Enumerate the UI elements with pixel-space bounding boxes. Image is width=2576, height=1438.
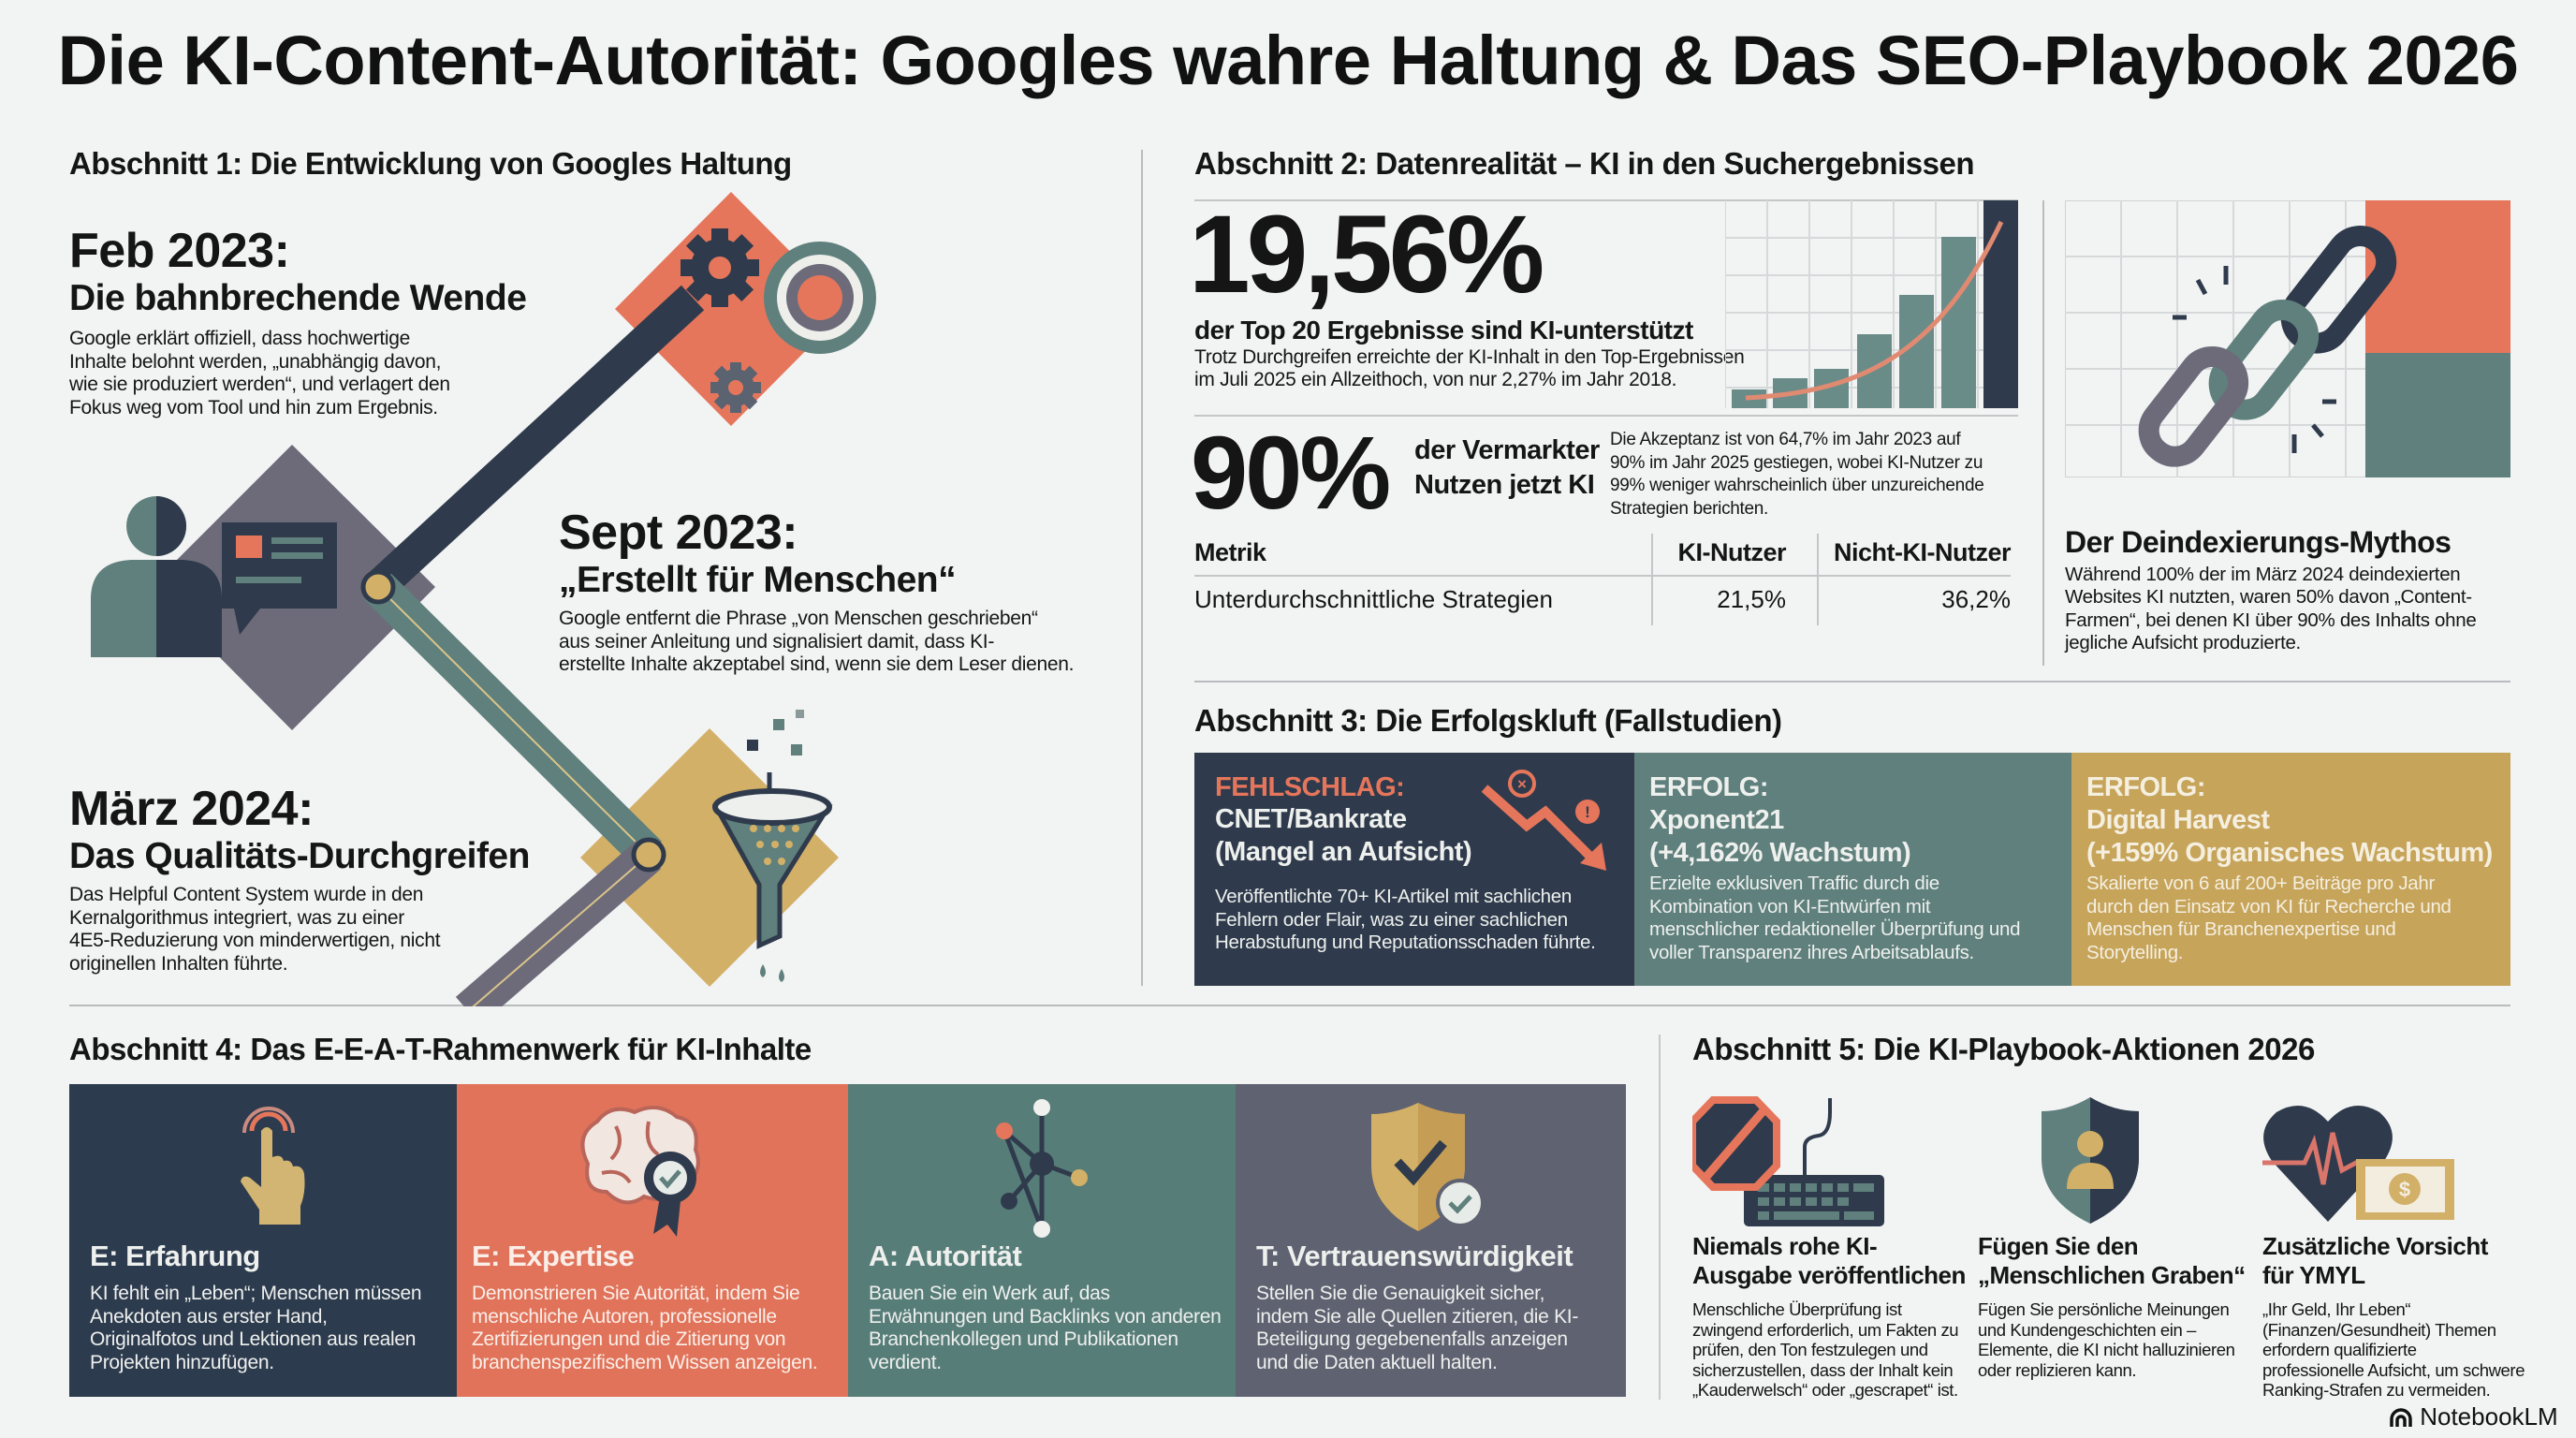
card: Xponent21: (+4,162% Wachstum): [1649, 838, 1910, 868]
panel: Autorität: Erwähnungen und Backlinks von anderen: [869, 1305, 1221, 1328]
panel: Expertise: [457, 1084, 848, 1397]
card: Xponent21: voller Transparenz ihres Arbeitsablaufs.: [1649, 942, 1974, 962]
panel: Vertrauenswürdigkeit: indem Sie alle Quellen zitieren, die KI-: [1256, 1305, 1578, 1328]
panel: Expertise: Demonstrieren Sie Autorität, indem Sie: [472, 1283, 799, 1304]
icon: falling arrow: !: [1585, 803, 1590, 821]
deindexing myth text: Während 100% der im März 2024 deindexierten: [2065, 564, 2460, 585]
section 2 heading: Abschnitt 2: Datenrealität – KI in den Suchergebnissen: [1194, 146, 1974, 181]
panel: Expertise: Zertifizierungen und die Zitierung von: [472, 1328, 785, 1350]
milestone: März 2024: Das Qualitäts-Durchgreifen: [69, 836, 530, 876]
milestone: Feb 2023: Die bahnbrechende Wende: [69, 278, 526, 318]
table: 36,2%: [1941, 585, 2011, 613]
stat description: Die Akzeptanz ist von 64,7% im Jahr 2023 auf: [1610, 430, 1960, 449]
panel: Autorität: verdient.: [869, 1352, 942, 1372]
action: never publish raw: Menschliche Überprüfung ist: [1692, 1299, 1902, 1319]
card: CNET failure: [1194, 753, 1634, 986]
panel: Erfahrung: Anekdoten aus erster Hand,: [90, 1305, 328, 1328]
stat: 19,56%: im Juli 2025 ein Allzeithoch, von nur 2,27% im Jahr 2018.: [1194, 369, 1676, 390]
milestone: Feb 2023: Feb 2023:: [69, 224, 289, 278]
stat: 19,56%: [1189, 193, 1744, 390]
icon: touch hand: [241, 1107, 305, 1225]
card: Xponent21: [1634, 753, 2071, 986]
stat: 90%: 90%: [1191, 416, 1388, 531]
card: Digital Harvest: Menschen für Branchenexpertise und: [2086, 918, 2396, 940]
panel: Erfahrung: E: Erfahrung: [90, 1240, 260, 1272]
action: human moat: „Menschlichen Graben“: [1978, 1261, 2246, 1289]
card: CNET failure: FEHLSCHLAG:: [1215, 772, 1404, 802]
card: CNET failure: CNET/Bankrate: [1215, 804, 1407, 834]
milestone: Sept 2023: „Erstellt für Menschen“: [559, 560, 956, 600]
milestone: Sept 2023: erstellte Inhalte akzeptabel sind, wenn sie dem Leser dienen.: [559, 653, 1074, 675]
icon: shield person: [2042, 1097, 2139, 1224]
stat label: Nutzen jetzt KI: [1414, 470, 1594, 500]
icon: falling arrow: [1481, 770, 1606, 871]
action: YMYL: professionelle Aufsicht, um schwere: [2262, 1359, 2525, 1380]
divider vertical section1/2: [1141, 150, 1143, 986]
panel: Vertrauenswürdigkeit: T: Vertrauenswürdigkeit: [1256, 1240, 1573, 1272]
icon: network: [996, 1099, 1088, 1238]
icon: funnel: [715, 710, 829, 982]
stat description: [1610, 430, 1983, 519]
stat: 19,56%: Trotz Durchgreifen erreichte der KI-Inhalt in den Top-Ergebnissen: [1194, 346, 1744, 368]
deindexing myth text: jegliche Aufsicht produzierte.: [2065, 632, 2301, 653]
card: Digital Harvest: [2071, 753, 2510, 986]
action: never publish raw: prüfen, den Ton festzulegen und: [1692, 1340, 1928, 1359]
panel: Erfahrung: Originalfotos und Lektionen aus realen: [90, 1328, 416, 1350]
action: never publish raw: sicherzustellen, dass der Inhalt kein: [1692, 1359, 1953, 1380]
stat: 19,56%: der Top 20 Ergebnisse sind KI-unterstützt: [1194, 315, 1693, 345]
action: never publish raw: „Kauderwelsch“ oder „gescrapet“ ist.: [1692, 1380, 1958, 1400]
panel: Expertise: menschliche Autoren, professionelle: [472, 1305, 777, 1328]
action: never publish raw: [1692, 1096, 1966, 1400]
card: Digital Harvest: Skalierte von 6 auf 200+ Beiträge pro Jahr: [2086, 873, 2435, 894]
milestone: März 2024: März 2024:: [69, 782, 314, 836]
milestone: März 2024: Das Helpful Content System wurde in den: [69, 884, 423, 905]
action: YMYL: Ranking-Strafen zu vermeiden.: [2262, 1380, 2490, 1400]
card: Digital Harvest: ERFOLG:: [2086, 772, 2205, 802]
title: Die KI-Content-Autorität: Googles wahre Haltung & Das SEO-Playbook 2026: [58, 22, 2518, 99]
section 1 heading: Abschnitt 1: Die Entwicklung von Googles Haltung: [69, 146, 792, 181]
action: human moat: [1978, 1097, 2246, 1380]
diamond: orange: [615, 192, 847, 426]
action: YMYL: Zusätzliche Vorsicht: [2262, 1232, 2488, 1260]
card: CNET failure: Veröffentlichte 70+ KI-Artikel mit sachlichen: [1215, 886, 1572, 907]
card: Digital Harvest: durch den Einsatz von KI für Recherche und: [2086, 895, 2452, 917]
section 3 heading: Abschnitt 3: Die Erfolgskluft (Fallstudien): [1194, 703, 1782, 738]
deindexing myth text: [2065, 525, 2476, 653]
diamond: gray: [150, 445, 435, 730]
action: human moat: Fügen Sie den: [1978, 1232, 2138, 1260]
icon: shield check: [1371, 1103, 1481, 1231]
milestone: März 2024: originellen Inhalten führte.: [69, 953, 287, 974]
card: Xponent21: Kombination von KI-Entwürfen mit: [1649, 895, 1930, 917]
action: never publish raw: zwingend erforderlich, um Fakten zu: [1692, 1320, 1958, 1339]
panel: Vertrauenswürdigkeit: Beteiligung gegebenenfalls anzeigen: [1256, 1328, 1568, 1350]
card: CNET failure: Herabstufung und Reputationsschaden führte.: [1215, 932, 1595, 953]
card: Xponent21: ERFOLG:: [1649, 772, 1768, 802]
card: CNET failure: (Mangel an Aufsicht): [1215, 837, 1471, 867]
table: Unterdurchschnittliche Strategien: [1194, 585, 1553, 613]
panel: Autorität: Bauen Sie ein Werk auf, das: [869, 1283, 1110, 1304]
action: human moat: oder replizieren kann.: [1978, 1359, 2136, 1380]
table: [1194, 534, 2011, 625]
action: YMYL: [2262, 1106, 2525, 1400]
deindexing myth text: Der Deindexierungs-Mythos: [2065, 525, 2451, 559]
section 4 heading: Abschnitt 4: Das E-E-A-T-Rahmenwerk für KI-Inhalte: [69, 1032, 812, 1066]
panel: Erfahrung: Projekten hinzufügen.: [90, 1352, 274, 1372]
card: Xponent21: menschlicher redaktioneller Überprüfung und: [1649, 918, 2020, 940]
bar chart: [1725, 200, 2018, 408]
icon: heart and money: [2262, 1106, 2454, 1222]
panel: Vertrauenswürdigkeit: und die Daten aktuell halten.: [1256, 1352, 1498, 1372]
stat description: 90% im Jahr 2025 gestiegen, wobei KI-Nutzer zu: [1610, 453, 1983, 472]
panel: Expertise: branchenspezifischem Wissen anzeigen.: [472, 1352, 817, 1372]
milestone: Sept 2023: [559, 506, 1074, 675]
stat description: 99% weniger wahrscheinlich über unzureichende: [1610, 476, 1983, 495]
panel: Erfahrung: KI fehlt ein „Leben“; Menschen müssen: [90, 1283, 421, 1304]
action: YMYL: (Finanzen/Gesundheit) Themen: [2262, 1320, 2496, 1339]
case study cards: [1194, 753, 2510, 986]
action: human moat: Fügen Sie persönliche Meinungen: [1978, 1299, 2229, 1319]
stat description: Strategien berichten.: [1610, 498, 1768, 519]
icon: heart and money: $: [2399, 1178, 2410, 1201]
timeline graphic: [91, 192, 876, 1006]
action: YMYL: erfordern qualifizierte: [2262, 1340, 2417, 1359]
stat label: [1414, 435, 1600, 500]
milestone: März 2024: [69, 782, 530, 974]
card: Xponent21: Xponent21: [1649, 805, 1784, 835]
action: human moat: und Kundengeschichten ein –: [1978, 1320, 2196, 1339]
milestone: Feb 2023: [69, 224, 526, 418]
card: Xponent21: Erzielte exklusiven Traffic durch die: [1649, 873, 1939, 894]
table: Nicht-KI-Nutzer: [1834, 538, 2011, 566]
milestone: Sept 2023: Google entfernt die Phrase „von Menschen geschrieben“: [559, 608, 1038, 629]
deindexing myth text: Websites KI nutzten, waren 50% davon „Content-: [2065, 586, 2472, 608]
milestone: Feb 2023: Fokus weg vom Tool und hin zum Ergebnis.: [69, 397, 438, 418]
action: human moat: Elemente, die KI nicht halluzinieren: [1978, 1340, 2235, 1359]
table: KI-Nutzer: [1677, 538, 1786, 566]
card: Digital Harvest: Digital Harvest: [2086, 805, 2270, 835]
panel: Expertise: E: Expertise: [472, 1240, 634, 1272]
table: Metrik: [1194, 538, 1266, 566]
action: YMYL: für YMYL: [2262, 1261, 2365, 1289]
deindexing myth text: Farmen“, bei denen KI über 90% des Inhalts ohne: [2065, 609, 2476, 631]
panel: Vertrauenswürdigkeit: Stellen Sie die Genauigkeit sicher,: [1256, 1283, 1544, 1304]
section 5 heading: Abschnitt 5: Die KI-Playbook-Aktionen 2026: [1692, 1032, 2315, 1066]
icon: gears: [681, 228, 761, 413]
milestone: Sept 2023: Sept 2023:: [559, 506, 798, 560]
card: Digital Harvest: Storytelling.: [2086, 942, 2183, 962]
table: 21,5%: [1717, 585, 1786, 613]
milestone: Feb 2023: wie sie produziert werden“, und verlagert den: [69, 374, 450, 395]
timeline bars: [378, 298, 693, 1011]
milestone: Feb 2023: Google erklärt offiziell, dass hochwertige: [69, 328, 410, 349]
icon: stop sign keyboard: [1692, 1096, 1884, 1226]
panel: Vertrauenswürdigkeit: [1236, 1084, 1626, 1397]
milestone: März 2024: Kernalgorithmus integriert, was zu einer: [69, 906, 404, 929]
milestone: März 2024: 4E5-Reduzierung von minderwertigen, nicht: [69, 930, 440, 951]
card: CNET failure: Fehlern oder Flair, was zu einer sachlichen: [1215, 908, 1568, 931]
E-E-A-T panels: [69, 1084, 1626, 1397]
panel: Erfahrung: [69, 1084, 457, 1397]
icon: target: [764, 242, 876, 354]
milestone: Feb 2023: Inhalte belohnt werden, „unabhängig davon,: [69, 350, 441, 373]
panel: Autorität: [848, 1084, 1236, 1397]
action: never publish raw: Niemals rohe KI-: [1692, 1232, 1877, 1260]
icon: falling arrow: ×: [1517, 775, 1527, 793]
diamond: gold: [580, 728, 839, 987]
icon: brain with badge: [580, 1106, 700, 1237]
panel: Autorität: A: Autorität: [869, 1240, 1021, 1272]
action: YMYL: „Ihr Geld, Ihr Leben“: [2262, 1299, 2410, 1319]
stat: 19,56%: 19,56%: [1189, 193, 1541, 316]
panel: Autorität: Branchenkollegen und Publikationen: [869, 1328, 1178, 1350]
milestone: Sept 2023: aus seiner Anleitung und signalisiert damit, dass KI-: [559, 631, 994, 652]
icon: person with chat: [91, 496, 337, 657]
action: never publish raw: Ausgabe veröffentlichen: [1692, 1261, 1966, 1289]
stat label: der Vermarkter: [1414, 435, 1600, 465]
node circles: [363, 572, 664, 870]
image: broken chain: [2065, 200, 2510, 477]
logo: NotebookLM: NotebookLM: [2420, 1402, 2558, 1431]
card: Digital Harvest: (+159% Organisches Wachstum): [2086, 838, 2493, 868]
